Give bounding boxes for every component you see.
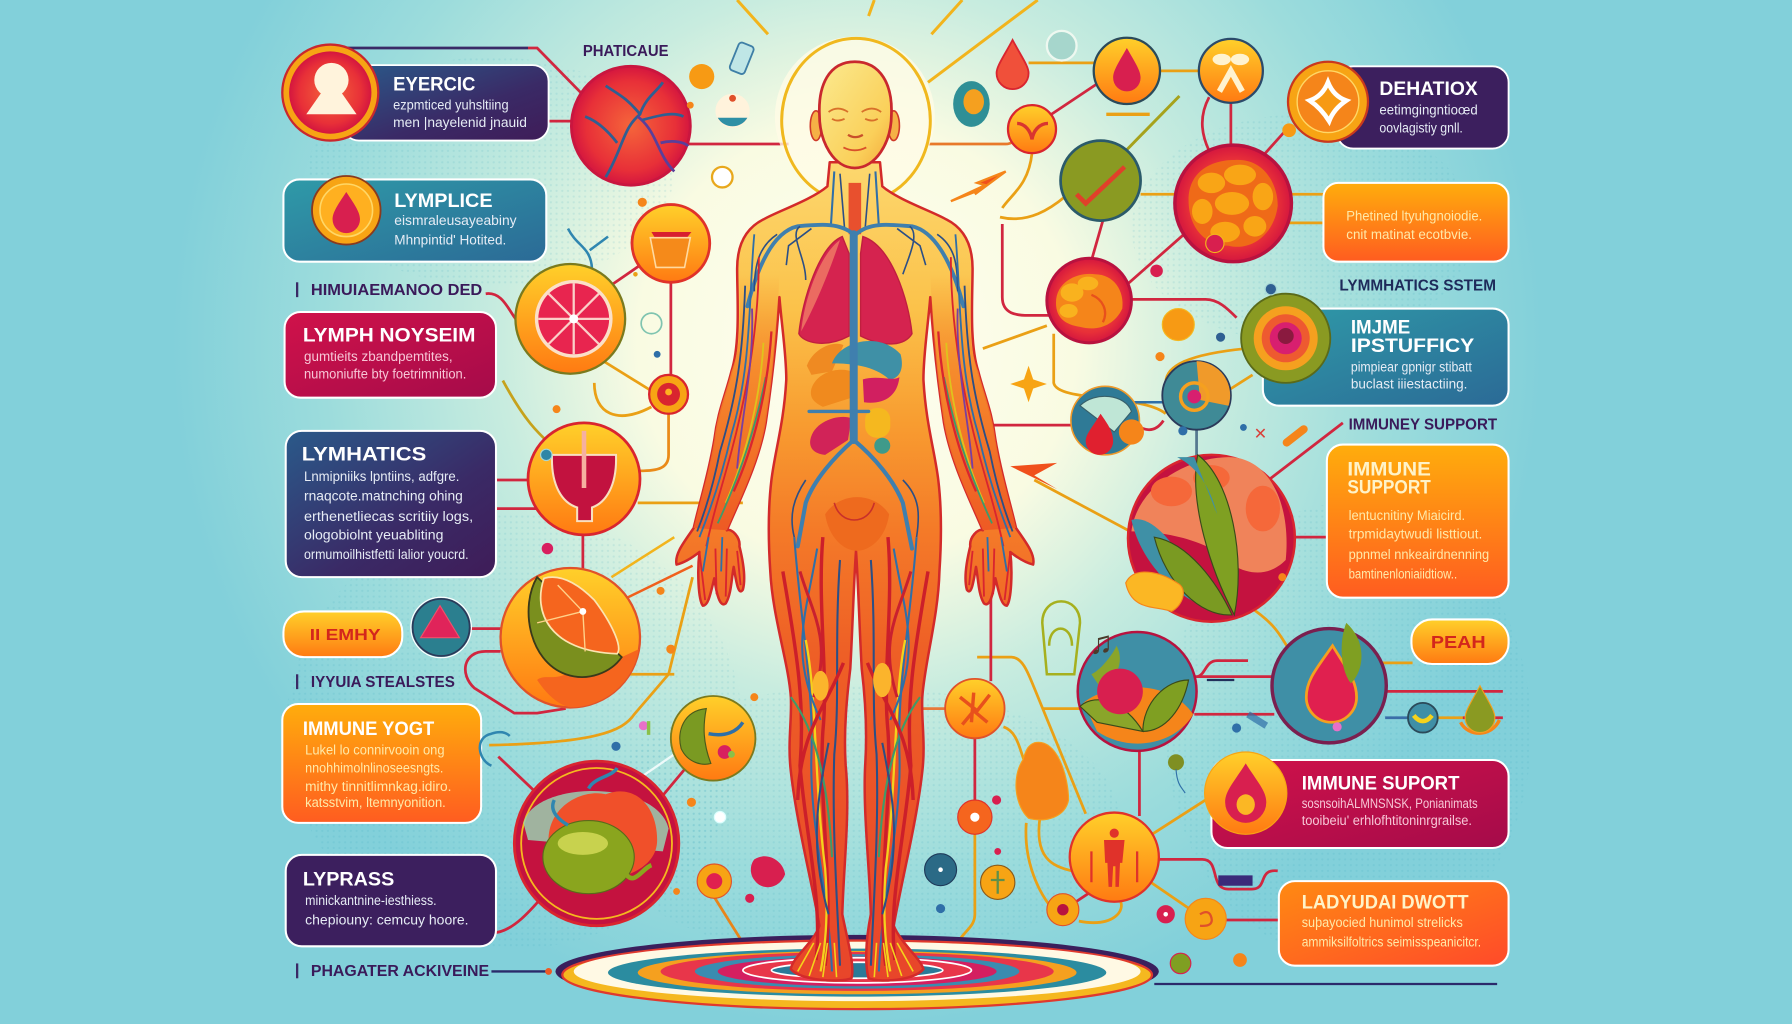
icon: oval gem xyxy=(953,81,990,127)
decorative dots xyxy=(541,64,1342,974)
lung highlight xyxy=(801,240,840,331)
heading: LYMHATICS xyxy=(302,444,426,466)
icon: drop outline xyxy=(997,40,1029,89)
icon: leaf and organ circle xyxy=(1126,455,1295,622)
body text: rnaqcote.matnching ohing xyxy=(304,489,463,504)
icon: diamond badge xyxy=(1288,62,1368,142)
body text: nnohhimolnlinoseesngts. xyxy=(305,761,443,776)
icon: orange ball xyxy=(1162,309,1194,341)
icon: dancer badge xyxy=(945,679,1005,738)
panel: DEHATIOX xyxy=(1288,62,1509,149)
label: PHAGATER ACKIVEINE xyxy=(296,963,552,980)
heading: IPSTUFFICY xyxy=(1351,335,1474,357)
body text: ammiksilfoltrics seimisspeanicitcr. xyxy=(1302,934,1481,949)
body text: men |nayelenid jnauid xyxy=(393,115,527,130)
icon: target node xyxy=(958,800,992,834)
panel: IMMUNE YOGT xyxy=(282,704,481,823)
arm colour shading xyxy=(694,274,1016,530)
heading: IMMUNE SUPORT xyxy=(1302,773,1460,795)
icon: small leaf circle xyxy=(671,696,755,781)
icon: orange arrow xyxy=(1010,463,1057,489)
pill: PEAH: PEAH xyxy=(1431,632,1486,652)
icon: phone pill xyxy=(729,42,755,75)
icon: small red node xyxy=(649,375,688,414)
icon: glass bubble xyxy=(1047,31,1077,61)
label: PHAGATER ACKIVEINE: PHAGATER ACKIVEINE xyxy=(311,963,489,980)
panel: LYPRASS xyxy=(286,855,496,946)
icon: music note: ♫ xyxy=(1089,625,1113,661)
panel: IMMUNE SUPORT xyxy=(1205,752,1509,848)
body text: Lnmipniiks lpntiins, adfgre. xyxy=(304,469,459,484)
panel box xyxy=(1279,881,1509,966)
body text: chepiouny: cemcuy hoore. xyxy=(305,913,469,928)
neck vessels xyxy=(831,171,879,234)
panel: orange note xyxy=(1323,183,1509,262)
icon: star xyxy=(1010,366,1047,402)
heading: LYMPH NOYSEIM xyxy=(303,325,475,347)
icon: capsule drop circle xyxy=(1071,386,1144,455)
body text: oovlagistiy gnll. xyxy=(1379,121,1463,136)
knee highlights xyxy=(813,663,891,701)
halo behind head xyxy=(775,37,935,197)
panel box xyxy=(286,431,496,577)
hook connector xyxy=(480,732,510,766)
panel box xyxy=(343,65,549,141)
icon: small brain circle xyxy=(1047,258,1131,343)
body text: trpmidaytwudi listtiout. xyxy=(1349,526,1482,541)
icon: lollipop node xyxy=(697,864,731,898)
icon: tomato circle xyxy=(514,761,679,926)
body text xyxy=(1351,359,1472,392)
body text xyxy=(305,893,469,928)
panel: EYERCIC xyxy=(282,45,549,141)
label: IMMUNEY SUPPORT: IMMUNEY SUPPORT xyxy=(1349,417,1498,434)
heading: LADYUDAI DWOTT xyxy=(1302,892,1469,914)
panel box xyxy=(286,855,496,946)
body text: gumtieits zbandpemtites, xyxy=(304,349,453,364)
heading: SUPPORT xyxy=(1347,477,1431,499)
heading: DEHATIOX xyxy=(1379,78,1478,100)
panel: LADYUDAI DWOTT xyxy=(1279,881,1509,966)
body text xyxy=(1302,915,1481,949)
icon: blood drop circle xyxy=(1272,623,1386,743)
body text xyxy=(1346,209,1482,242)
label: IYYUIA STEALSTES: IYYUIA STEALSTES xyxy=(311,674,455,691)
body text: eetimgingntioœd xyxy=(1379,102,1478,117)
face xyxy=(829,109,881,150)
icon: person badge xyxy=(282,45,378,141)
panel box xyxy=(1337,66,1509,149)
body text: pimpiear gpnigr stibatt xyxy=(1351,359,1472,374)
body text: suþayocied hunimol strelicks xyxy=(1302,915,1463,930)
human figure with lymphatic system xyxy=(676,62,1033,980)
icon: red blob xyxy=(751,856,785,887)
icon: lightning bolt xyxy=(951,171,1006,201)
panel box xyxy=(1211,760,1509,848)
left leg vessels xyxy=(783,537,843,977)
body text: lentucnitiny Miaicird. xyxy=(1349,508,1465,523)
icon: orange organ xyxy=(1016,742,1069,820)
body text: bamtinenloniaiidtiow.. xyxy=(1349,566,1457,581)
icon: ring circle xyxy=(1162,361,1231,430)
body text: buclast iiiestactiing. xyxy=(1351,377,1467,392)
panel box xyxy=(1263,309,1509,406)
body text xyxy=(1349,508,1489,581)
right leg vessels xyxy=(867,537,928,977)
label: LYMMHATICS SSTEM: LYMMHATICS SSTEM xyxy=(1339,277,1496,294)
icon: green drop xyxy=(1461,686,1499,733)
panel box xyxy=(282,704,481,823)
left arm vessels xyxy=(697,234,771,600)
head xyxy=(819,62,892,168)
heading xyxy=(1351,317,1474,357)
body silhouette xyxy=(676,162,1033,980)
pill: II EMHY xyxy=(283,611,402,657)
heading: LYMPLICE xyxy=(394,190,493,212)
heading: LYPRASS xyxy=(303,869,394,891)
body text xyxy=(394,213,517,248)
abdominal organs xyxy=(807,341,902,551)
heading xyxy=(1347,458,1431,499)
central lymph trunk xyxy=(747,225,963,549)
body text xyxy=(1379,102,1478,136)
ears xyxy=(810,111,899,141)
icon: figure badge xyxy=(981,865,1015,899)
halftone texture xyxy=(286,57,1531,960)
heading: IMMUNE YOGT xyxy=(303,718,434,740)
body text: ezpmticed yuhsltiing xyxy=(393,98,509,113)
body text: sosnsoihALMNSNSK, Ponianimats xyxy=(1302,796,1478,811)
icon: ball capsule xyxy=(715,94,750,128)
body text: katsstvim, ltemnyonition. xyxy=(305,795,446,810)
icon: red drop circle xyxy=(1094,38,1160,104)
body text: eismraleusayeabiny xyxy=(394,213,517,228)
icon: fruit and leaf circle xyxy=(1078,632,1197,751)
body text xyxy=(393,98,527,130)
icon: triangle badge xyxy=(411,597,471,658)
panel: IMMUNE SUPPORT xyxy=(1327,445,1509,598)
body text: cnit matinat ecotbvie. xyxy=(1346,227,1472,242)
body text: Lukel lo connirvooin ong xyxy=(305,742,445,757)
panel: LYMHATICS xyxy=(286,431,496,577)
panel box xyxy=(283,179,546,262)
right arm vessels xyxy=(938,234,1013,600)
label: PHATICAUE: PHATICAUE xyxy=(583,43,669,60)
platform under figure xyxy=(555,935,1159,1009)
panel box xyxy=(1327,445,1509,598)
icon: person figure circle xyxy=(1070,813,1159,902)
icon: drop badge xyxy=(312,176,381,245)
icon: grapefruit circle xyxy=(515,264,625,374)
body text: minickantnine-iesthiess. xyxy=(305,893,437,908)
icon: lime circle xyxy=(501,568,640,707)
heading: IMJME xyxy=(1351,317,1410,339)
icon: target badge xyxy=(1241,294,1330,383)
icon: small V circle xyxy=(1008,105,1056,153)
icon: large brain circle xyxy=(1175,145,1291,262)
connector lines xyxy=(343,48,1503,984)
panel: IMJME IPSTUFFICY xyxy=(1241,294,1509,406)
body text: mithy tinnitlimnkag.idiro. xyxy=(305,779,451,794)
body text xyxy=(304,469,473,562)
icon: vein tree circle xyxy=(571,66,690,185)
body text: Phetined ltyuhgnoiodie. xyxy=(1346,209,1482,224)
pill: II EMHY: II EMHY xyxy=(310,627,381,644)
icon: bag outline xyxy=(1042,601,1080,674)
icon: orange cup circle xyxy=(632,205,710,282)
heading: IMMUNE xyxy=(1347,458,1431,480)
sun rays xyxy=(737,0,1038,82)
icon: compass badge xyxy=(925,854,957,886)
body text xyxy=(304,349,466,381)
icon: glass circle xyxy=(528,423,640,535)
icon: small eye node xyxy=(1408,703,1438,733)
icon: orange node xyxy=(1047,894,1079,926)
icon: spiral badge xyxy=(1185,898,1226,939)
body text: numoniufte bty foetrimnition. xyxy=(304,366,466,381)
label: HIMUIAEMANOO DED: HIMUIAEMANOO DED xyxy=(311,282,482,299)
body text xyxy=(305,742,451,810)
panel: LYMPH NOYSEIM xyxy=(285,312,496,398)
lungs xyxy=(799,237,912,344)
panel box xyxy=(285,312,496,398)
body text: ormumoilhistfetti lalior youcrd. xyxy=(304,547,469,562)
branching vessels torso xyxy=(754,226,958,537)
icon: drop badge xyxy=(1205,752,1287,834)
body text: Mhnpintid' Hotited. xyxy=(394,233,506,248)
body text: tooibeiu' erhlofhtitoninrgrailse. xyxy=(1302,813,1472,828)
pill: PEAH xyxy=(1411,619,1509,664)
body text xyxy=(1302,796,1478,828)
body text: ppnmel nnkeairdnenning xyxy=(1349,547,1489,562)
panel: LYMPLICE xyxy=(283,176,546,262)
body text: ologobiolnt yeuabliting xyxy=(304,527,443,542)
body text: erthenetliecas scritiiy logs, xyxy=(304,509,473,524)
heading: EYERCIC xyxy=(393,73,475,95)
icon: pendant xyxy=(712,167,733,187)
icon: green check circle xyxy=(1061,141,1141,221)
decorative dots: ✕ xyxy=(1254,426,1267,443)
icon: X badge circle xyxy=(1199,39,1263,103)
